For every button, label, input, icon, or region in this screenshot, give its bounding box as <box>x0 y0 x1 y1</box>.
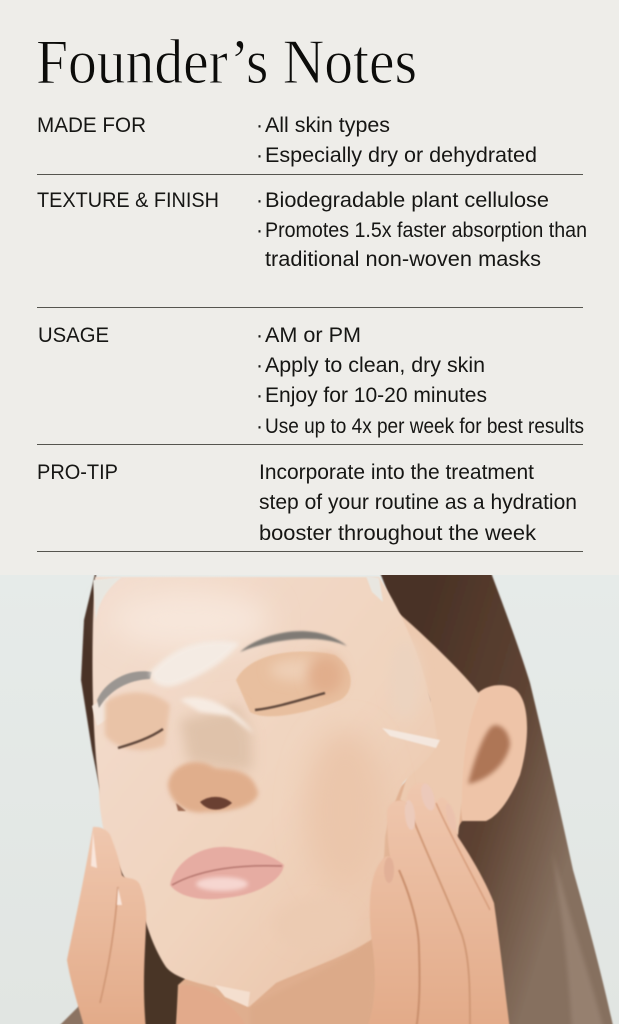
face and mask <box>92 577 438 1007</box>
background panel <box>0 0 619 575</box>
side of face <box>395 610 480 835</box>
brows <box>97 631 347 708</box>
row: pro-tip: Incorporate into the treatment <box>259 461 534 484</box>
row: usage: · <box>256 324 263 347</box>
row: usage: Use up to 4x per week for best results <box>265 415 584 438</box>
row: made for: All skin types <box>265 114 390 137</box>
left hand <box>67 827 146 1024</box>
row: usage: · <box>256 415 263 438</box>
chin mask fold <box>215 985 250 1007</box>
hair <box>55 570 614 1024</box>
row: pro-tip: booster throughout the week <box>259 522 537 545</box>
row: made for: Especially dry or dehydrated <box>265 144 537 167</box>
nose <box>168 697 258 813</box>
row: texture and finish: · <box>256 219 263 242</box>
row: texture and finish: Biodegradable plant cellulose <box>265 189 549 212</box>
lips <box>170 847 284 899</box>
row: pro-tip: step of your routine as a hydration <box>259 491 577 514</box>
row: texture and finish: traditional non-woven masks <box>265 248 541 271</box>
row: texture and finish: TEXTURE & FINISH <box>37 189 219 212</box>
row: usage: USAGE <box>38 324 109 347</box>
row: made for: · <box>256 114 263 137</box>
photo: woman applying sheet mask <box>0 570 619 1024</box>
row: pro-tip <box>37 461 583 552</box>
row: usage: · <box>256 354 263 377</box>
row: texture and finish: Promotes 1.5x faster absorption than <box>265 219 587 242</box>
row: texture and finish <box>37 189 587 308</box>
row: usage <box>37 324 584 445</box>
row: made for: MADE FOR <box>37 114 146 137</box>
mask edge highlights <box>92 576 440 748</box>
right hand <box>366 782 510 1024</box>
eye openings <box>105 652 351 750</box>
row: texture and finish: · <box>256 189 263 212</box>
neck <box>176 760 470 1024</box>
row: usage: · <box>256 384 263 407</box>
row: usage: AM or PM <box>265 324 361 347</box>
row: made for: · <box>256 144 263 167</box>
row: pro-tip: PRO-TIP <box>37 461 118 484</box>
title: Founder’s Notes <box>36 27 417 97</box>
row: made for <box>37 114 583 175</box>
row: usage: Enjoy for 10-20 minutes <box>265 384 487 407</box>
row: usage: Apply to clean, dry skin <box>265 354 485 377</box>
ear <box>458 685 527 821</box>
